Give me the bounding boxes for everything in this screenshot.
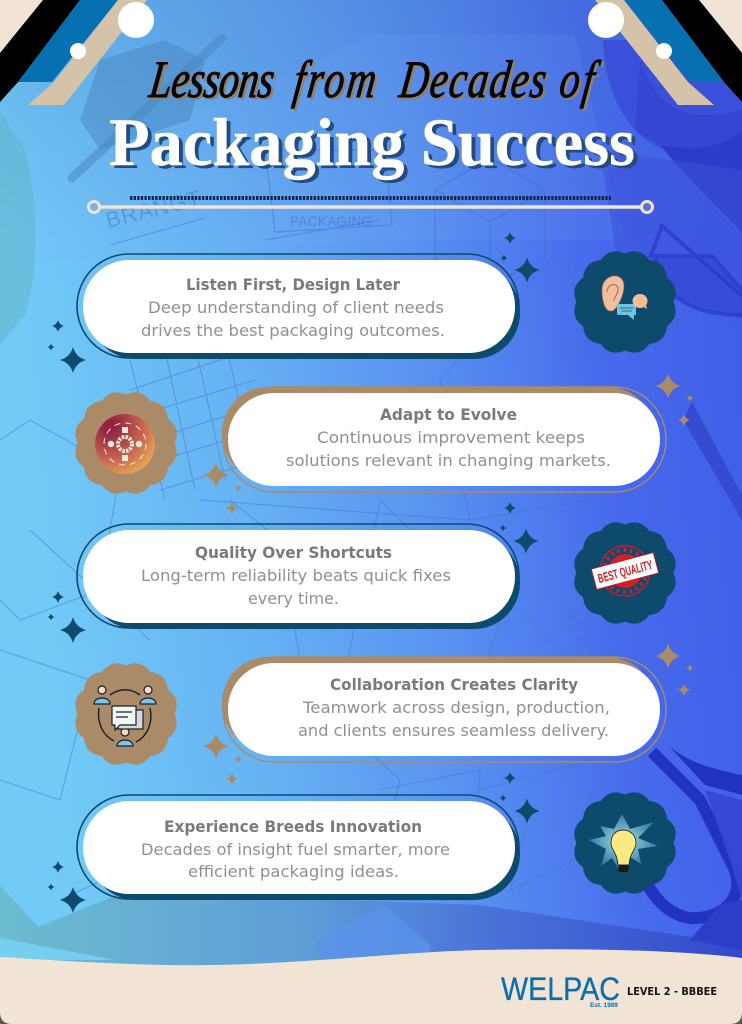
title: script line: of: [559, 53, 605, 111]
icon: process cycle medal: [75, 392, 177, 494]
card 5: Experience: Experience Breeds Innovation: [164, 817, 422, 836]
marker pen: [683, 402, 742, 520]
sparkles card 2: [204, 374, 694, 514]
ruler: [0, 938, 115, 960]
desk lower band: [0, 885, 742, 970]
title: main line: Packaging Success: [109, 104, 635, 180]
card 4: Collaboration: [222, 657, 666, 762]
crumpled paper bottom: [315, 905, 430, 965]
title: main line: Packaging Success: [113, 107, 639, 183]
card 1: Listen First: Deep understanding of client needs: [148, 298, 444, 317]
card 2: Adapt to Evolve: Adapt to Evolve: [380, 405, 517, 424]
card 1: Listen First: [77, 254, 520, 359]
scissors: [645, 752, 737, 918]
crumpled paper top-left: [80, 40, 205, 150]
mug top-right: [603, 40, 742, 152]
icon: light bulb: [574, 792, 676, 894]
card 5: Experience: [77, 795, 520, 900]
card 3: Quality Over Shortcuts: every time.: [248, 589, 339, 608]
established year: Est. 1989: [590, 1002, 618, 1009]
title: script line: [145, 51, 606, 111]
icon: team collaboration cycle: [75, 663, 177, 765]
card 1: Listen First: drives the best packaging outcomes.: [141, 321, 445, 340]
card 5: Experience: Decades of insight fuel smarter, more: [141, 840, 450, 859]
icon: best quality stamp: BEST QUALITY: [596, 557, 654, 586]
icon: best quality stamp: [574, 522, 676, 624]
background: blue gradient desk photo: PACKAGING: [290, 213, 372, 229]
top-left corner ribbons: [0, 0, 154, 105]
title: script line: Lessons: [148, 53, 280, 111]
BBBEE level: LEVEL 2 - BBBEE: [627, 986, 717, 998]
title divider: [88, 198, 652, 212]
card 2: Adapt to Evolve: solutions relevant in changing markets.: [286, 451, 611, 470]
title: script line: from: [293, 53, 382, 111]
sparkles card 1: [48, 232, 540, 373]
card 4: Collaboration: Teamwork across design, production,: [302, 698, 610, 717]
faint paper lettering: BRANGT: [103, 185, 204, 233]
sketch lines: [0, 250, 742, 900]
icon: ear and speech bubbles: [574, 251, 676, 353]
card 2: Adapt to Evolve: Continuous improvement keeps: [317, 428, 585, 447]
card 4: Collaboration: and clients ensures seamless delivery.: [298, 721, 609, 740]
title: script line: Lessons: [146, 51, 278, 109]
card 3: Quality Over Shortcuts: Quality Over Shortcuts: [195, 543, 392, 562]
top-right corner ribbons: [588, 0, 742, 105]
card 2: Adapt to Evolve: [222, 387, 666, 492]
cup at left: [0, 112, 36, 345]
title: script line: of: [556, 51, 603, 109]
title: script line: Decades: [398, 53, 552, 111]
paper sheet: [28, 35, 625, 260]
card 3: Quality Over Shortcuts: [77, 524, 520, 629]
footer band: [0, 949, 742, 1024]
sparkles card 3: [48, 502, 538, 643]
card 3: Quality Over Shortcuts: Long-term reliability beats quick fixes: [141, 566, 451, 585]
WELPAC logo: WELPAC: [501, 971, 620, 1007]
card 1: Listen First: Listen First, Design Later: [186, 275, 400, 294]
card 5: Experience: efficient packaging ideas.: [188, 862, 399, 881]
title: script line: Decades: [396, 51, 550, 109]
glasses: [655, 258, 742, 314]
title: script line: from: [290, 51, 380, 109]
card 4: Collaboration: Collaboration Creates Clarity: [330, 675, 579, 694]
sparkles card 5: [48, 772, 540, 913]
sparkles card 4: [204, 644, 694, 785]
pen top-left: [72, 38, 222, 178]
